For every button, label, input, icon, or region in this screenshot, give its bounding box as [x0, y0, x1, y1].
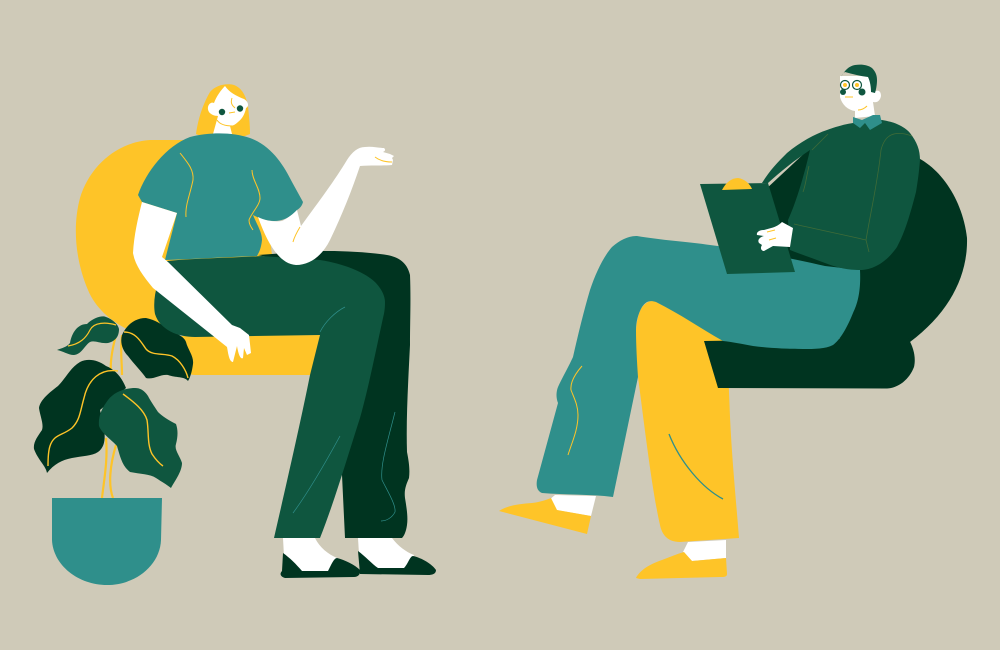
teal pot [52, 498, 162, 585]
front leg [154, 256, 385, 538]
shoe and sock: near foot [499, 495, 596, 534]
shoe and sock: right foot [358, 538, 436, 575]
back leg [258, 251, 410, 538]
leaf: top right [121, 318, 193, 381]
leaf: large green right [99, 388, 182, 488]
plant stems [102, 335, 122, 498]
near leg crease line [568, 366, 582, 455]
man's hand [757, 222, 793, 251]
teal collar [853, 115, 882, 130]
far leg crease line [669, 434, 723, 499]
clipboard [700, 178, 795, 274]
dark green sweater [762, 120, 920, 270]
face and neck [208, 86, 248, 134]
yellow far leg [636, 301, 739, 542]
sweater seam lines [794, 133, 912, 252]
head with hair and glasses [840, 65, 881, 118]
man's armchair seat [704, 338, 915, 388]
shirt and arm crease lines [180, 153, 392, 242]
right arm and hand [258, 147, 394, 265]
left arm and hand [133, 202, 251, 362]
woman's yellow armchair [76, 140, 320, 375]
woman [133, 84, 436, 578]
teal t-shirt [138, 133, 303, 260]
shoe and sock: far foot [636, 540, 727, 579]
man [499, 65, 920, 579]
teal near leg [537, 236, 860, 497]
trouser crease lines [293, 307, 395, 521]
hair [196, 84, 250, 138]
man's dark armchair back [760, 147, 967, 352]
plant in pot [34, 316, 193, 585]
leaf: large dark left [34, 360, 126, 473]
leaf: small top left [57, 316, 119, 355]
shoe and sock: left foot [281, 538, 360, 578]
